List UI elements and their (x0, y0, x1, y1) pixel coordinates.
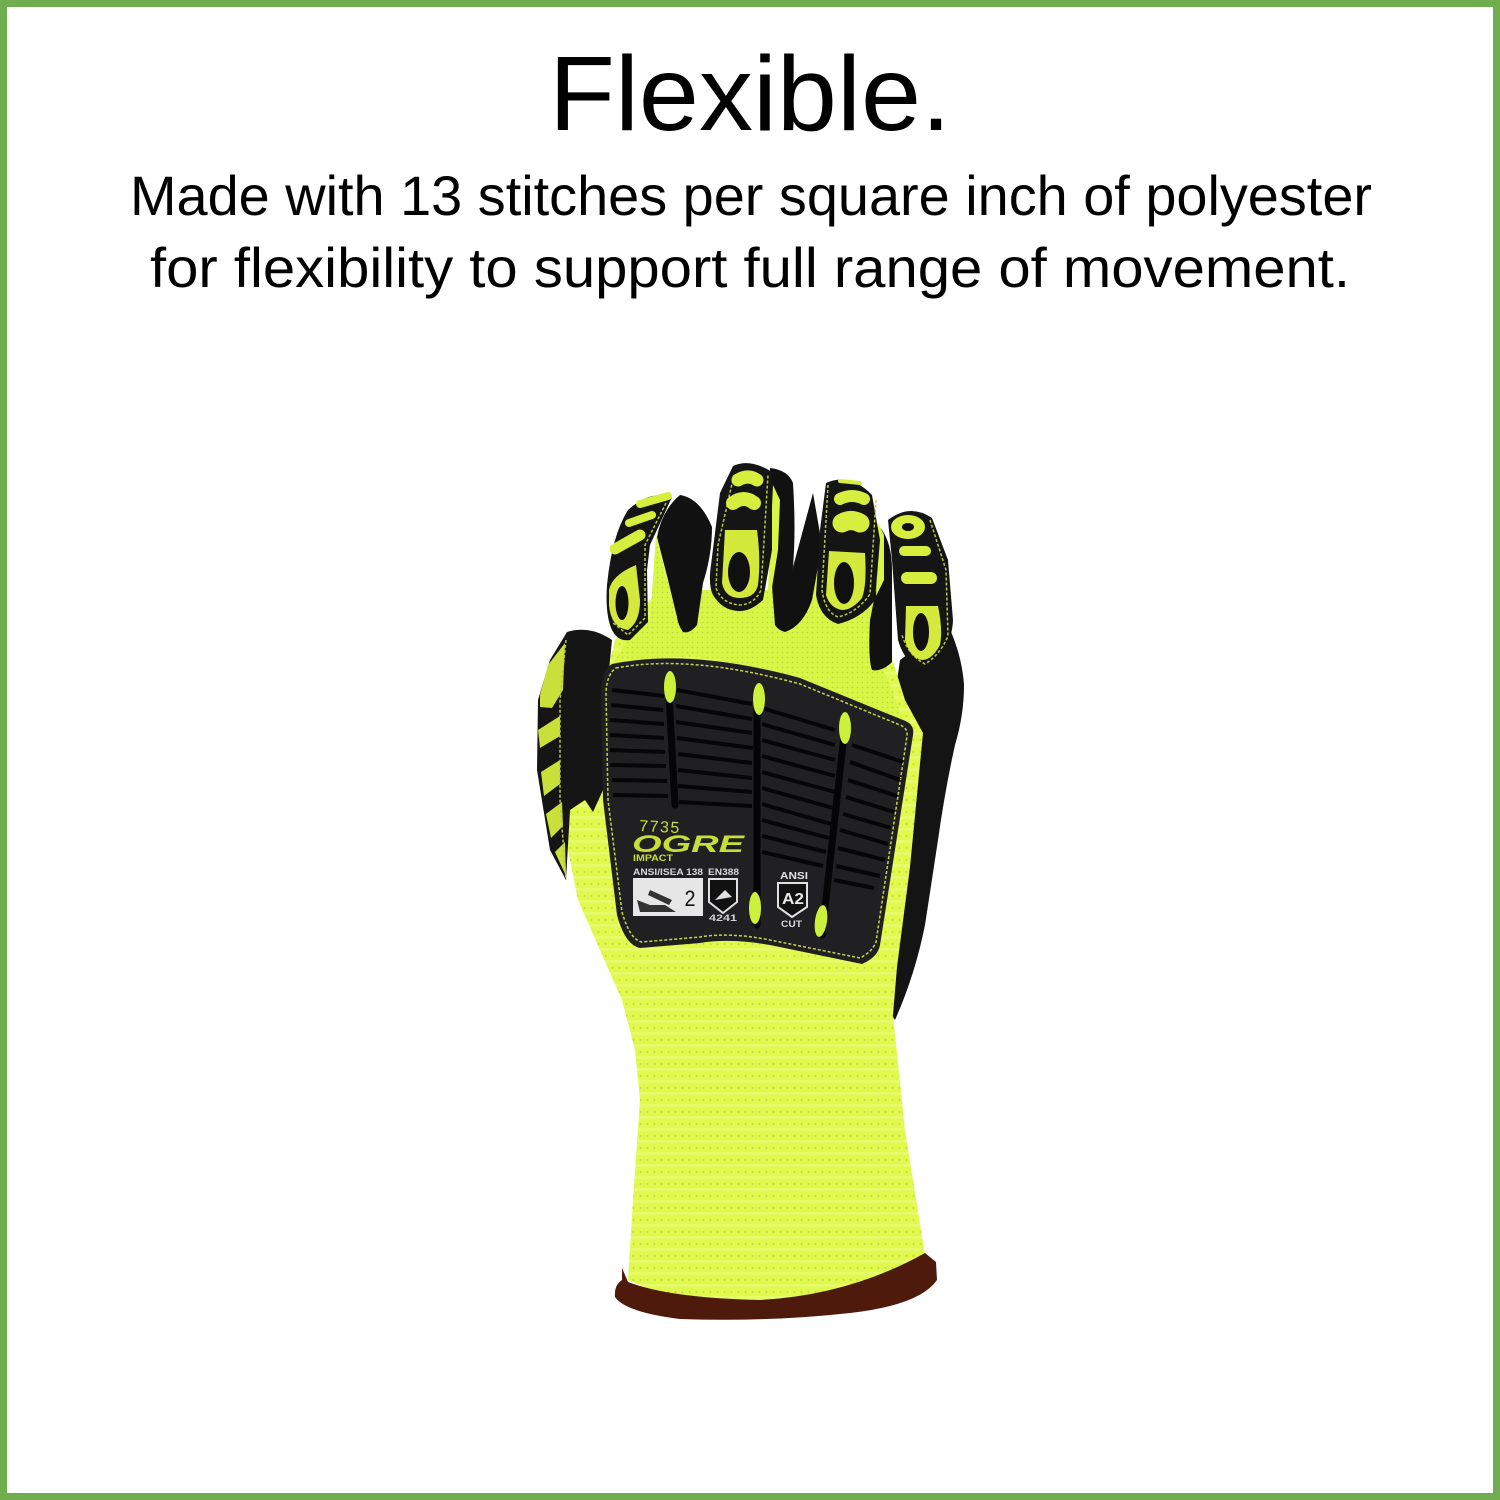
title: Flexible. (549, 35, 951, 153)
upper palm knit (612, 535, 905, 725)
yellow knit slivers beside fingers (768, 485, 884, 600)
pad ribs (610, 690, 903, 888)
product label 7735 OGRE IMPACT: IMPACT (633, 853, 674, 863)
certification text and badges: ANSI/ISEA 138 (633, 867, 703, 877)
certification text and badges: 2 (684, 886, 696, 911)
black webbing between fingers (657, 468, 892, 670)
product label 7735 OGRE IMPACT: OGRE (632, 831, 746, 858)
glove body knit (560, 600, 925, 1302)
brown cuff band (615, 1253, 937, 1320)
description text: Made with 13 stitches per square inch of polyester (130, 164, 1372, 227)
teardrop vents (664, 671, 851, 938)
certification text and badges: A2 (782, 891, 804, 908)
back of hand black edge (880, 625, 964, 1020)
certification text and badges (633, 867, 808, 929)
finger 3 (816, 479, 880, 624)
pad vertical grooves (669, 695, 844, 935)
glove illustration (537, 463, 964, 1320)
finger 2 (710, 463, 772, 611)
certification text and badges: CUT (781, 919, 803, 929)
finger 4 (888, 511, 953, 670)
certification text and badges: 4241 (709, 913, 737, 923)
certification text and badges: ANSI (780, 871, 808, 882)
description text: for flexibility to support full range of movement. (150, 236, 1350, 299)
product label 7735 OGRE IMPACT (632, 818, 746, 863)
finger 1 (607, 495, 672, 640)
thumb (537, 630, 612, 880)
product label 7735 OGRE IMPACT: 7735 (639, 818, 681, 837)
palm impact pad (601, 658, 913, 964)
description text (130, 164, 1372, 299)
certification text and badges: EN388 (708, 867, 739, 877)
